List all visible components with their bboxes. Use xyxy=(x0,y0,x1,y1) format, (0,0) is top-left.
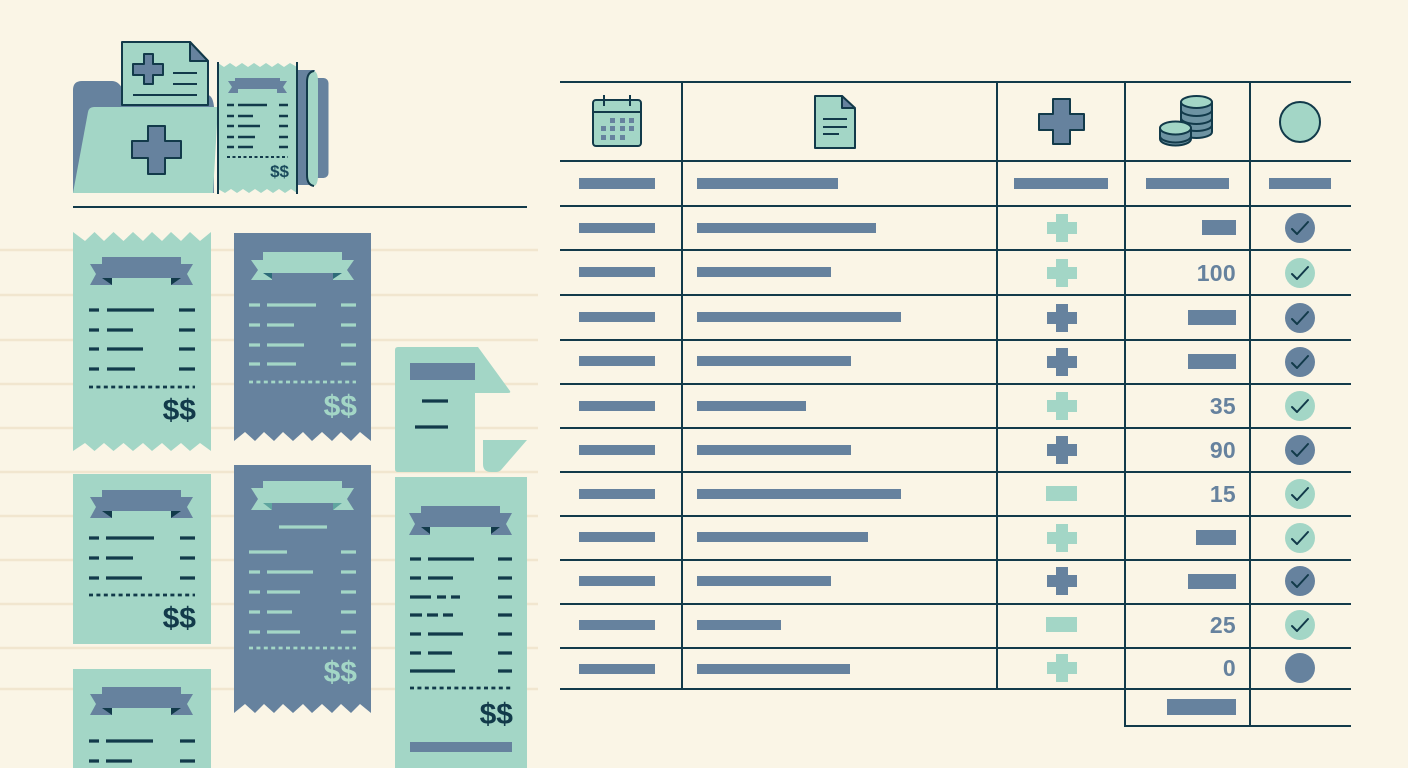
receipt: slate, long middle xyxy=(234,465,371,713)
header row xyxy=(579,178,1331,189)
receipt: mint, tall right xyxy=(395,477,527,768)
icon: document xyxy=(815,96,855,148)
line items xyxy=(89,741,195,761)
row 4 xyxy=(579,347,1315,377)
ribbon xyxy=(90,687,193,715)
receipt: mint, middle left xyxy=(73,474,211,644)
row 5 xyxy=(579,391,1315,421)
total: $$ xyxy=(324,656,357,689)
medical document xyxy=(122,42,208,105)
row 7 xyxy=(579,479,1315,509)
small receipt: $$ xyxy=(270,162,290,181)
line items xyxy=(410,559,512,671)
icon: calendar xyxy=(593,95,641,146)
total: $$ xyxy=(324,390,357,423)
ribbon xyxy=(90,257,193,285)
row 9 xyxy=(579,566,1315,596)
row 2: 100 xyxy=(1197,260,1236,286)
row 10 xyxy=(579,610,1315,640)
expense table xyxy=(560,82,1351,727)
receipt: mint, top left xyxy=(73,232,211,451)
row 3 xyxy=(579,303,1315,333)
total cell xyxy=(1167,699,1236,715)
row 6 xyxy=(579,435,1315,465)
row 11: 0 xyxy=(1223,655,1236,681)
slate binder pages xyxy=(297,70,328,186)
line items xyxy=(89,538,195,578)
ribbon xyxy=(90,490,193,518)
folder back xyxy=(73,81,214,193)
line items xyxy=(249,305,356,364)
small receipt xyxy=(218,62,297,194)
row 1 xyxy=(579,213,1315,243)
folder front with cross xyxy=(73,107,218,193)
row 11 xyxy=(579,653,1315,683)
total: $$ xyxy=(480,698,513,731)
row 2 xyxy=(579,258,1315,288)
icon: medical folder with document and receipt xyxy=(73,42,328,194)
receipt: mint, bottom left xyxy=(73,669,211,768)
icon: medical plus xyxy=(1039,99,1084,144)
row 7: 15 xyxy=(1210,481,1236,507)
divider under folder xyxy=(73,206,527,208)
total: $$ xyxy=(163,602,196,635)
total bar xyxy=(410,742,512,752)
icon: coins xyxy=(1160,96,1212,146)
line items xyxy=(249,527,356,632)
total: $$ xyxy=(163,394,196,427)
line items xyxy=(89,310,195,369)
ribbon xyxy=(251,481,354,510)
receipt: slate, top middle xyxy=(234,233,371,441)
table grid xyxy=(560,82,1351,727)
ribbon xyxy=(409,506,512,535)
torn document xyxy=(395,347,527,472)
row 10: 25 xyxy=(1210,612,1236,638)
ribbon xyxy=(251,252,354,280)
icon: status circle xyxy=(1280,102,1320,142)
row 6: 90 xyxy=(1210,437,1236,463)
row 5: 35 xyxy=(1210,393,1236,419)
row 8 xyxy=(579,523,1315,553)
torn corner xyxy=(483,440,527,472)
